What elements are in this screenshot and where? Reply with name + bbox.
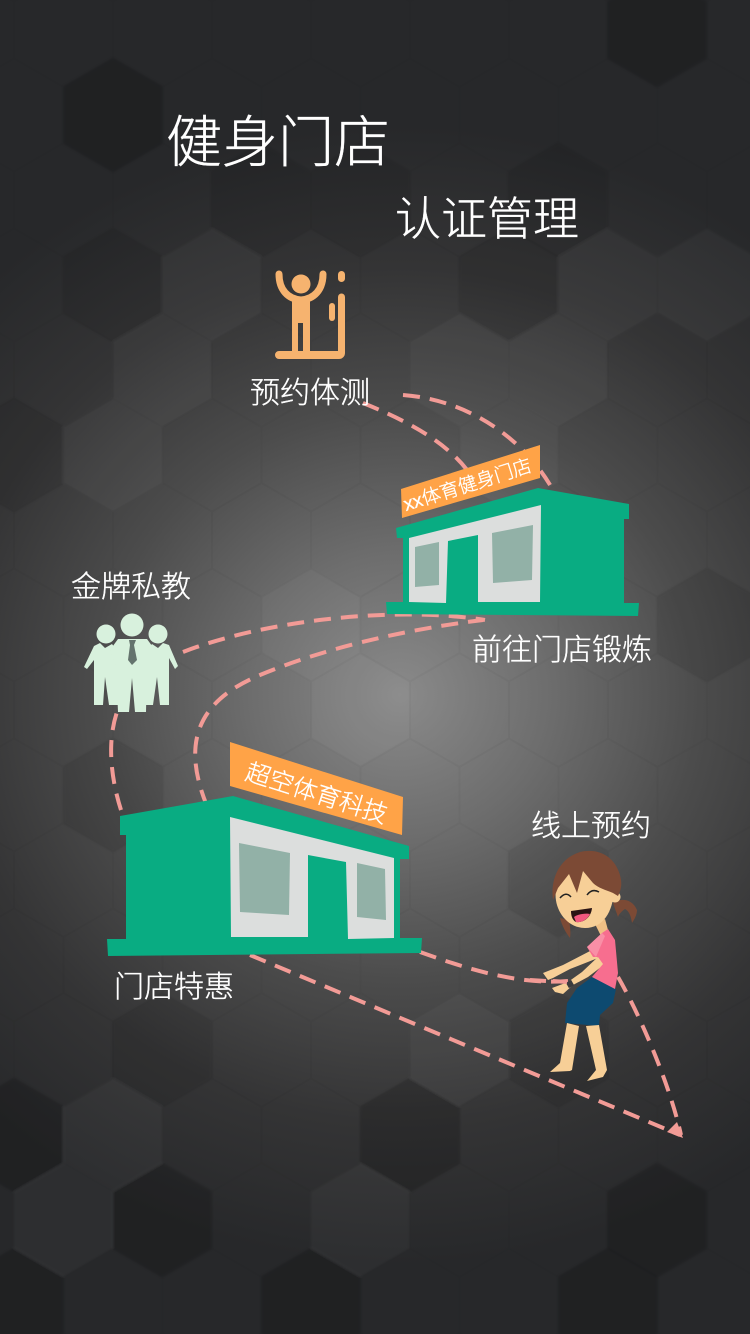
store 1: xx体育健身门店 [386,445,639,616]
label: 门店特惠: 门店特惠 [114,971,234,1004]
icon: body test figure [275,271,345,359]
title line 1: 健身门店 [166,111,390,174]
store 1: xx体育健身门店: xx体育健身门店 [401,455,534,516]
label: 前往门店锻炼: 前往门店锻炼 [472,634,652,667]
label: 线上预约: 线上预约 [531,810,651,843]
title line 2: 认证管理 [395,193,579,245]
label: 金牌私教: 金牌私教 [71,571,191,604]
arrow head [667,1122,683,1138]
store 2: 超空体育科技: 超空体育科技 [242,758,391,829]
label: 预约体测: 预约体测 [250,377,370,410]
store 2: 超空体育科技 [107,742,422,956]
dashed route lines [111,395,681,1135]
illustration: laughing girl [530,851,637,1081]
icon: group of coaches [84,614,178,712]
